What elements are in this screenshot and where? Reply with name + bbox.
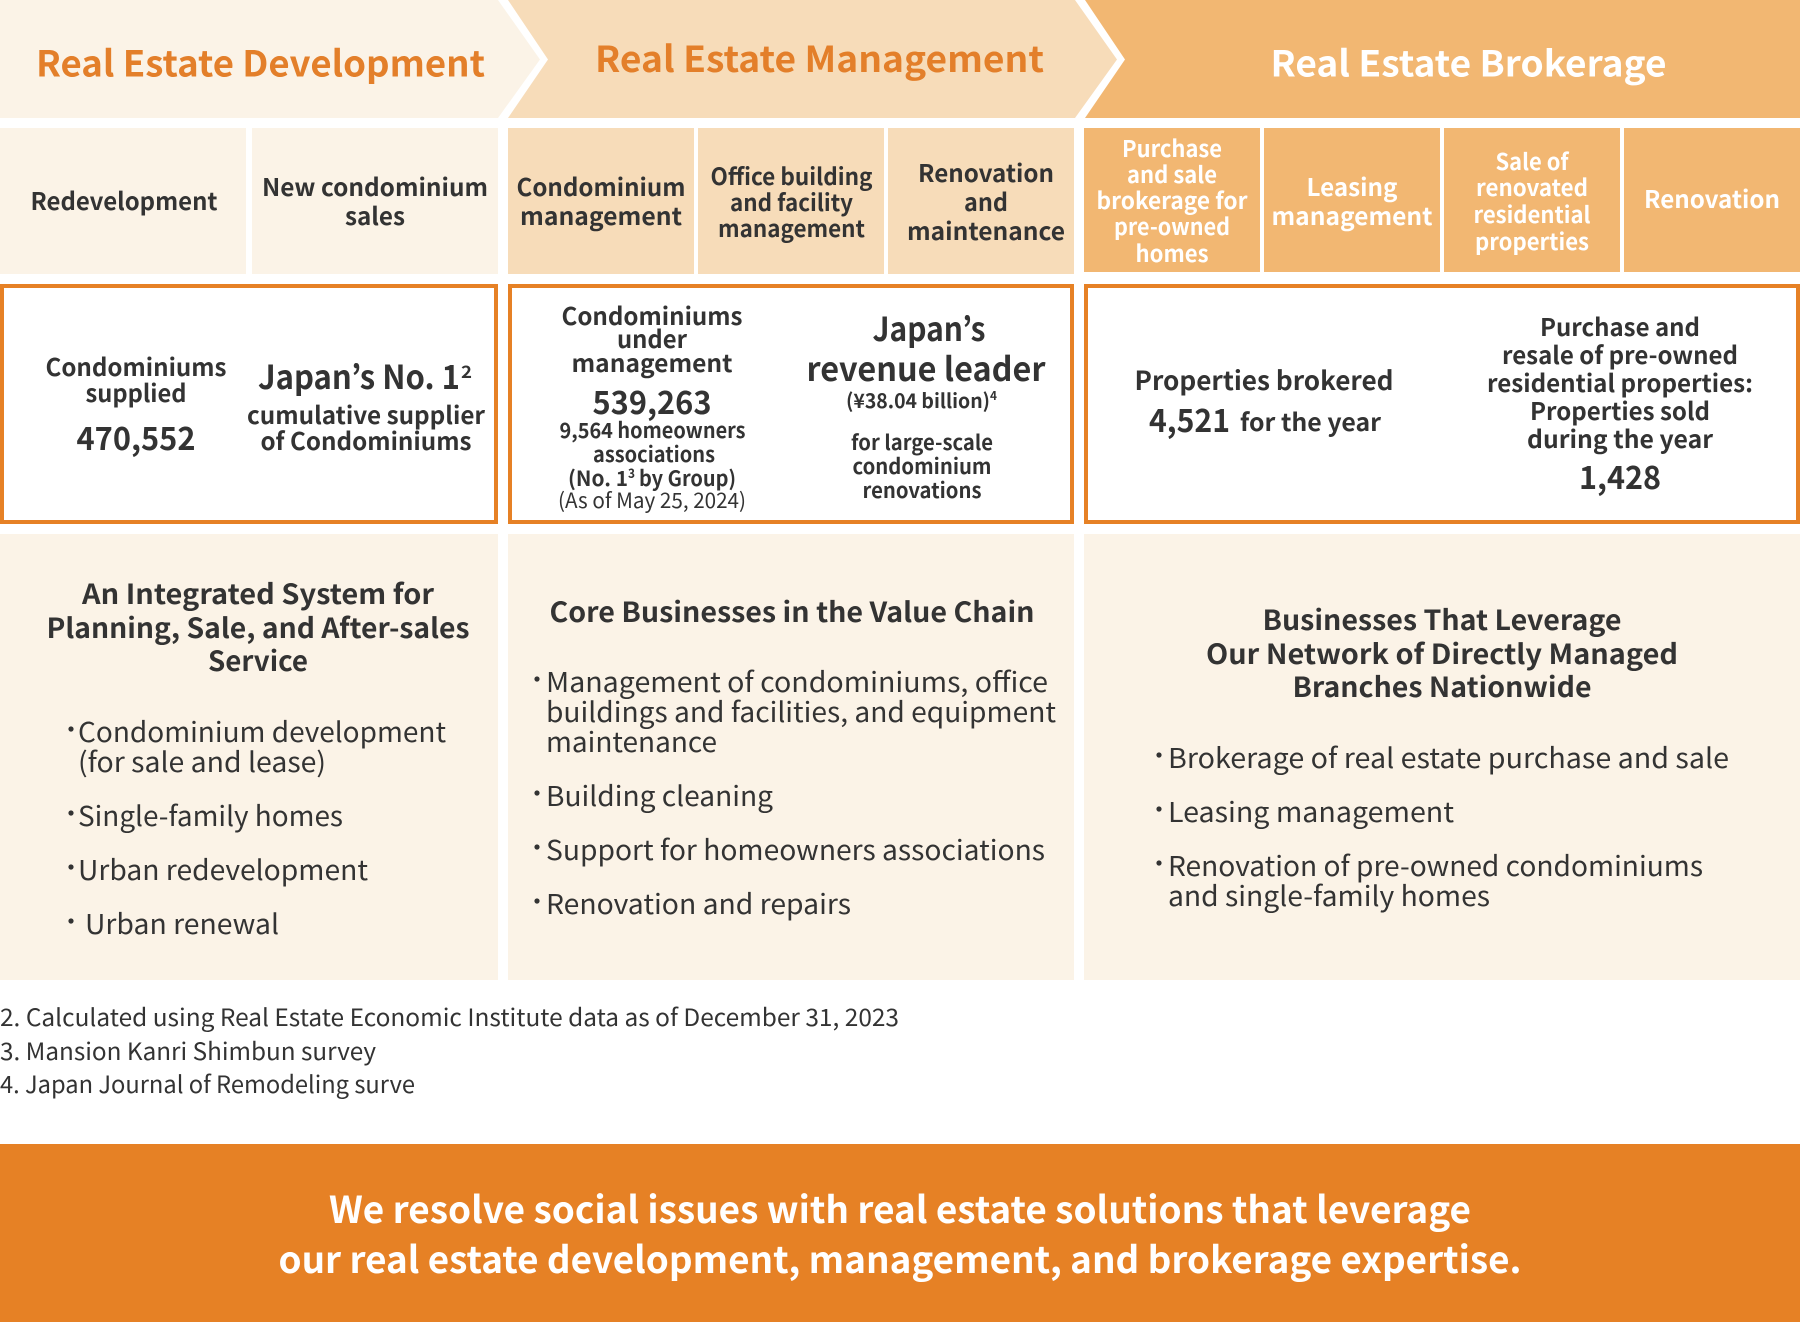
cell: sale of renovated residential properties: Sale of [1496,143,1570,177]
stat box: properties brokered: residential properties: [1487,365,1753,400]
stat box: condominiums supplied: Condominiums [46,349,226,384]
stat box: condominiums under management: 3 [628,463,635,482]
description panel: directly managed branches: Our Network of Directly Managed [1206,632,1678,672]
cell: purchase and sale brokerage: brokerage for [1096,182,1248,216]
description panel: integrated system: Urban redevelopment [78,848,368,888]
cell: redevelopment [0,128,246,274]
stat box: condominiums under management: condominium [852,451,992,481]
banner: closing statement [0,1144,1800,1322]
description panel: integrated system: An Integrated System for [81,572,435,612]
stat box: condominiums under management: Japan’s [872,303,986,351]
stat box: condominiums supplied: 2 [461,358,472,383]
cell: purchase and sale brokerage: homes [1136,235,1208,269]
arrow header: real estate management [508,0,1117,118]
stat box: condominiums under management: associations [593,439,715,469]
description panel: directly managed branches: Leasing management [1168,790,1454,830]
cell: leasing management: management [1272,198,1432,233]
description panel: directly managed branches: Brokerage of real estate purchase and sale [1168,736,1729,776]
cell: purchase and sale brokerage: pre-owned [1114,208,1230,242]
description panel: integrated system: Urban renewal [85,902,279,942]
arrow header: real estate brokerage [1085,0,1800,118]
description panel: integrated system: Service [208,639,308,679]
stat box: condominiums supplied: supplied [86,375,186,410]
cell: renovation and maintenance: Renovation [918,155,1054,190]
arrow header: real estate brokerage: Real Estate Brokerage [1270,36,1666,88]
stat box: properties brokered: resale of pre-owned [1502,337,1738,372]
description panel: integrated system: Condominium development [78,710,446,750]
banner: closing statement: We resolve social issues with real estate solutions that leverage [329,1180,1471,1234]
stat box: condominiums under management: management [572,345,732,380]
cell: new condominium sales [252,128,498,274]
banner: closing statement: our real estate development, management, and brokerage expertise. [278,1230,1522,1284]
description panel: core businesses: Management of condominiums, office [546,660,1048,700]
stat box: properties brokered: Properties sold [1530,393,1710,428]
cell: condominium management [508,128,694,274]
panel: real estate brokerage column [1084,0,1800,980]
cell: office building and facility management: management [718,210,865,244]
stat box: properties brokered: during the year [1527,421,1713,456]
stat box: condominiums supplied: Japan’s No. 1 [258,351,460,399]
description panel: core businesses: buildings and facilities, and equipment [546,690,1056,730]
description panel: integrated system [0,534,498,980]
stat box: condominiums supplied: 470,552 [76,414,196,460]
cell: renovation and maintenance [888,128,1074,274]
stat box: condominiums under management: (No. 1 [568,463,628,493]
description panel: directly managed branches: Businesses That Leverage [1262,598,1622,638]
stat box: properties brokered: 1,428 [1579,453,1661,499]
stat box: condominiums under management: (As of May 25, 2024) [558,485,746,515]
cell: renovation: Renovation [1644,181,1780,216]
stat box: condominiums under management: by Group) [639,463,736,493]
stat box: condominiums under management: revenue leader [806,343,1046,391]
cell: leasing management: Leasing [1306,169,1398,204]
panel: real estate management column [508,0,1117,980]
arrow header: real estate management: Real Estate Management [595,31,1044,83]
cell: redevelopment: Redevelopment [30,183,218,218]
footnotes: 2. Calculated using Real Estate Economic Institute data as of December 31, 2023 [0,998,899,1033]
cell: sale of renovated residential properties [1444,128,1620,272]
stat box: properties brokered: 4,521 [1149,396,1230,442]
description panel: directly managed branches: Renovation of pre-owned condominiums [1168,844,1703,884]
cell: office building and facility management: and facility [730,184,853,218]
cell: purchase and sale brokerage: and sale [1127,156,1217,190]
arrow header: real estate development: Real Estate Development [36,36,485,88]
stat box: condominiums under management: Condominiums [562,298,742,333]
description panel: directly managed branches: and single-family homes [1168,874,1490,914]
cell: office building and facility management [698,128,884,274]
stat box: properties brokered [1086,286,1798,522]
cell: purchase and sale brokerage: Purchase [1122,130,1222,164]
description panel: core businesses: Core Businesses in the Value Chain [550,590,1034,630]
cell: renovation and maintenance: and [964,184,1008,219]
footnotes [0,998,899,1100]
stat box: properties brokered: Purchase and [1540,309,1700,344]
cell: new condominium sales: sales [345,198,405,233]
cell: renovation [1624,128,1800,272]
panel: real estate development column [0,0,540,980]
cell: condominium management: management [520,198,682,233]
cell: purchase and sale brokerage [1084,128,1260,272]
stat box: condominiums under management: 4 [990,387,997,404]
description panel: directly managed branches [1084,534,1800,980]
description panel: integrated system: (for sale and lease) [78,740,326,780]
stat box: condominiums under management: 9,564 homeowners [560,415,746,445]
description panel: core businesses: Renovation and repairs [546,882,851,922]
description panel: directly managed branches: Branches Nationwide [1292,665,1592,705]
stat box: condominiums under management: for large-scale [851,427,993,457]
cell: renovation and maintenance: maintenance [907,213,1065,248]
description panel: core businesses: maintenance [546,720,717,760]
stat box: condominiums under management: (¥38.04 billion) [846,385,990,414]
cell: sale of renovated residential properties: residential [1474,196,1590,230]
stat box: condominiums under management: 539,263 [592,378,712,424]
stat box: condominiums supplied [2,286,496,522]
description panel: integrated system: Planning, Sale, and After-sales [46,606,470,646]
footnotes: 3. Mansion Kanri Shimbun survey [0,1032,376,1067]
stat box: properties brokered: Properties brokered [1134,361,1394,398]
cell: new condominium sales: New condominium [262,169,488,204]
cell: sale of renovated residential properties: renovated [1476,169,1588,203]
description panel: core businesses: Support for homeowners associations [546,828,1045,868]
cell: office building and facility management: Office building [710,158,872,192]
cell: sale of renovated residential properties: properties [1475,223,1589,257]
cell: condominium management: Condominium [516,169,686,204]
footnotes: 4. Japan Journal of Remodeling surve [0,1065,415,1100]
stat box: condominiums under management: under [617,321,687,356]
stat box: condominiums supplied: cumulative supplier [247,397,485,432]
stat box: condominiums under management: renovations [862,475,982,505]
stat box: condominiums supplied: of Condominiums [260,423,472,458]
description panel: core businesses [508,534,1074,980]
cell: leasing management [1264,128,1440,272]
arrow header: real estate development [0,0,540,118]
stat box: condominiums under management [510,286,1072,522]
stat box: properties brokered: for the year [1240,404,1381,439]
description panel: integrated system: Single-family homes [78,794,343,834]
description panel: core businesses: Building cleaning [546,774,773,814]
